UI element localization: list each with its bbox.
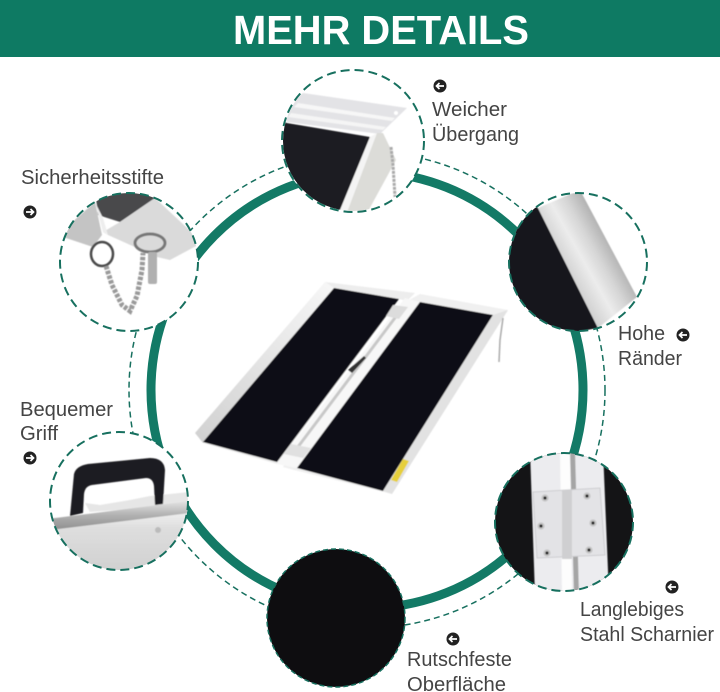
chain bbox=[106, 253, 143, 311]
ring right bbox=[135, 234, 165, 252]
left carpet panel bbox=[203, 288, 399, 462]
aluminium top strip bbox=[280, 93, 407, 134]
right carpet panel bbox=[297, 302, 493, 491]
screws bbox=[538, 493, 596, 556]
centre rail bbox=[277, 298, 420, 468]
aluminium edge bbox=[538, 190, 637, 328]
icon: left arrow bbox=[676, 328, 690, 342]
pin and chain bbox=[499, 318, 503, 362]
icon: left arrow bbox=[446, 632, 460, 646]
left side flange bbox=[195, 282, 334, 443]
rail bbox=[53, 502, 188, 530]
carpet bbox=[509, 207, 598, 331]
handle bbox=[70, 458, 165, 516]
icon: right arrow bbox=[24, 206, 36, 218]
chain bbox=[391, 147, 395, 197]
dashed outline bbox=[282, 70, 424, 212]
circle background bbox=[282, 70, 424, 212]
dashed outline bbox=[509, 193, 647, 331]
dashed outline bbox=[267, 549, 405, 687]
dashed outline bbox=[60, 193, 198, 331]
label: Weicher Übergang bbox=[432, 80, 519, 146]
label: Bequemer Griff bbox=[20, 399, 113, 464]
label: Langlebiges Stahl Scharnier bbox=[580, 580, 714, 646]
ring left bbox=[91, 242, 113, 266]
screw bbox=[155, 527, 161, 533]
dashed outline bbox=[50, 432, 188, 570]
grey flange bbox=[346, 133, 396, 215]
detail: high edges bbox=[505, 190, 647, 335]
icon: left arrow bbox=[434, 80, 446, 92]
hole bbox=[394, 111, 398, 115]
detail: safety pins bbox=[55, 190, 200, 331]
dashed outline bbox=[495, 453, 633, 591]
aluminium plate right bbox=[103, 198, 200, 260]
text: Hohe bbox=[618, 323, 665, 345]
carpet bbox=[283, 122, 370, 210]
detail: steel hinge bbox=[495, 450, 633, 595]
detail: non-slip surface bbox=[267, 549, 405, 687]
upper plate bbox=[85, 492, 190, 512]
green ring bbox=[151, 172, 583, 608]
text: Sicherheitsstifte bbox=[21, 167, 164, 189]
circle background bbox=[50, 432, 188, 570]
side strip bbox=[339, 134, 376, 210]
text: Bequemer bbox=[20, 399, 113, 421]
text: Rutschfeste bbox=[407, 649, 512, 671]
thin dashed outer ring bbox=[129, 152, 605, 628]
lower plate bbox=[57, 513, 187, 570]
carpet circle bbox=[495, 453, 633, 591]
pin bbox=[148, 252, 157, 284]
icon: right arrow bbox=[24, 452, 36, 464]
text: Langlebiges bbox=[580, 599, 684, 621]
title: MEHR DETAILS bbox=[233, 7, 529, 53]
circle background bbox=[60, 193, 198, 331]
text: Ränder bbox=[618, 348, 682, 370]
header banner bbox=[0, 0, 720, 57]
label: Rutschfeste Oberfläche bbox=[407, 632, 512, 692]
label: Sicherheitsstifte bbox=[21, 167, 164, 218]
carpet circle bbox=[267, 549, 405, 687]
text: Griff bbox=[20, 423, 58, 445]
hinges bbox=[386, 305, 408, 319]
aluminium rail bbox=[530, 450, 609, 595]
hinge knuckle bbox=[562, 490, 572, 559]
detail: smooth transition bbox=[270, 70, 424, 215]
text: Stahl Scharnier bbox=[580, 624, 714, 646]
hinge plate bbox=[533, 488, 605, 558]
icon: left arrow bbox=[666, 580, 678, 594]
aluminium plate left bbox=[66, 202, 102, 247]
aluminium frame left bbox=[203, 282, 415, 464]
right flange shading bbox=[383, 310, 508, 494]
carpet bbox=[96, 193, 154, 222]
aluminium frame right bbox=[283, 294, 508, 494]
text: Übergang bbox=[432, 124, 519, 146]
label: Hohe Ränder bbox=[618, 323, 690, 370]
central ramp photo bbox=[195, 282, 508, 494]
warning label bbox=[391, 459, 409, 482]
text: Weicher bbox=[432, 99, 507, 121]
centre gap bbox=[560, 450, 572, 595]
circle background bbox=[509, 193, 647, 331]
detail: handle bbox=[48, 432, 190, 575]
